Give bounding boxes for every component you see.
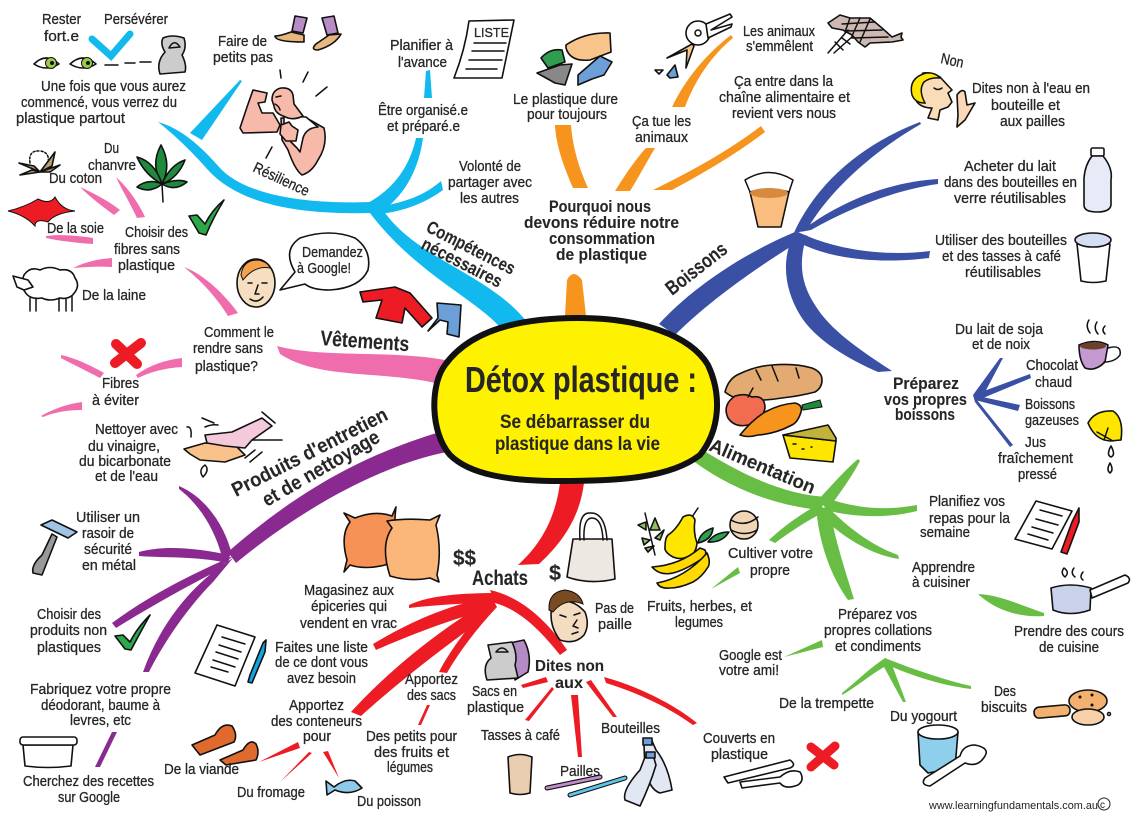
label: Chocolat chaud	[1026, 357, 1079, 391]
label: Sacs en plastique: Sacs en	[472, 683, 517, 700]
label: Non: Non	[939, 50, 965, 72]
label: Ça entre dans la chaîne alimentaire et revient vers nous	[719, 73, 851, 122]
label: Être organisé.e et préparé.e: et préparé.e	[387, 118, 460, 135]
label: Être organisé.e et préparé.e: Être organisé.e	[378, 102, 468, 119]
label: Google est votre ami!	[719, 647, 783, 679]
heading: Alimentation: Alimentation	[706, 435, 818, 499]
label: Choisir des produits non plastiques: produits non	[30, 622, 107, 639]
label: Fruits, herbes, et legumes: legumes	[675, 614, 723, 631]
label: Apprendre à cuisiner: à cuisiner	[912, 574, 970, 591]
icon: head saying no with hand	[911, 73, 975, 127]
label: Des petits pour des fruits et légumes	[366, 728, 457, 776]
label: Ça tue les animaux: animaux	[635, 129, 688, 146]
icon: bread, apple, carrot, cheese	[725, 364, 836, 462]
label: Faire de petits pas: petits pas	[213, 49, 273, 66]
label: Du poisson: Du poisson	[357, 793, 421, 810]
icon: reusable cup	[1075, 233, 1111, 282]
label: Une fois que vous aurez commencé	[16, 78, 186, 127]
icon: head with speech bubble	[237, 233, 369, 307]
label: Rester fort.e: Rester	[42, 11, 81, 28]
label: Préparez vos propres boissons	[884, 374, 967, 424]
heading: Compétences nécessaires: nécessaires	[418, 234, 506, 292]
label: Le plastique dure pour toujours: pour toujours	[527, 106, 607, 123]
heading: Vêtements: Vêtements	[320, 327, 410, 356]
panel: Compétences nécessaires branch	[16, 11, 532, 327]
label: Utiliser un rasoir de sécurité en métal: en métal	[82, 557, 136, 574]
label: Ça entre dans la chaîne alimentaire et revient vers nous: revient vers nous	[732, 105, 836, 122]
label: Cultiver votre propre	[728, 545, 813, 579]
label: Le plastique dure pour toujours: Le plastique dure	[513, 91, 618, 108]
label: De la viande: De la viande	[164, 761, 239, 778]
label: Choisir des produits non plastiques: Choisir des	[37, 606, 101, 623]
icon: list: LISTE	[474, 25, 509, 40]
heading: Boissons: Boissons	[662, 238, 732, 300]
icon: meal list and pencil	[1015, 501, 1079, 554]
icon: plastic cutlery	[724, 760, 802, 788]
heading: Compétences nécessaires: Compétences	[423, 217, 519, 279]
label: Cherchez des recettes sur Google: sur Google	[58, 789, 120, 806]
icon: sheep	[13, 268, 78, 311]
icon: plastic pieces	[537, 33, 612, 85]
label: Faites une liste de ce dont vous avez besoin: Faites une liste	[275, 639, 368, 656]
heading: Pourquoi nous devons réduire notre consommation de plastique	[524, 197, 679, 264]
label: Choisir des fibres sans plastique: Choisir des	[125, 224, 188, 241]
label: Bouteilles: Bouteilles	[601, 720, 660, 737]
panel: Produits d'entretien et de nettoyage branch	[20, 404, 447, 806]
icon: seal tangled in net	[828, 15, 903, 53]
red branches	[259, 483, 697, 782]
label: Rester fort.e	[42, 11, 81, 45]
label: Des petits pour des fruits et légumes: des fruits et	[374, 744, 450, 761]
label: Résilience: Résilience	[250, 159, 312, 200]
icon: red cross	[811, 746, 835, 767]
label: Volonté de partager avec les autres: partager avec	[448, 174, 532, 191]
label: Acheter du lait dans des bouteilles en verre réutilisables: verre réutilisables	[954, 190, 1066, 207]
label: Préparez vos propres boissons: boissons	[895, 405, 955, 424]
label: Pas de paille	[595, 600, 634, 633]
label: Sacs en plastique	[467, 683, 524, 716]
icon: lemon with drops	[1088, 411, 1122, 473]
label: Persévérer: Persévérer	[104, 11, 168, 28]
heading: Produits d'entretien et de nettoyage: Produits d'entretien	[228, 404, 392, 501]
label: Du lait de soja et de noix: et de noix	[972, 336, 1030, 353]
heading: Achats with money signs: Achats	[472, 567, 528, 590]
label: Dites non à l'eau en bouteille et aux pailles: Dites non à l'eau en	[972, 80, 1090, 97]
heading: Produits d'entretien et de nettoyage: et de nettoyage	[258, 426, 384, 511]
panel: Vêtements branch	[8, 140, 461, 417]
panel: Alimentation branch	[638, 364, 1129, 786]
label: Chocolat chaud: chaud	[1035, 374, 1072, 391]
heading: Pourquoi nous devons réduire notre consommation de plastique: devons réduire notre	[524, 213, 679, 232]
blue branches	[659, 122, 1031, 447]
heading: Achats with money signs: $	[549, 562, 561, 585]
central topic	[434, 318, 717, 481]
label: Couverts en plastique: Couverts en	[703, 730, 775, 747]
label: Prendre des cours de cuisine: de cuisine	[1039, 639, 1099, 656]
icon: tub	[20, 737, 77, 768]
label: Nettoyer avec du vinaigre, du bicarbonate et de l'eau: du bicarbonate	[79, 453, 171, 470]
label: Utiliser un rasoir de sécurité en métal: Utiliser un	[76, 509, 140, 526]
label: Les animaux s'emmêlent: s'emmêlent	[746, 38, 814, 55]
label: Des petits pour des fruits et légumes: Des petits pour	[366, 728, 457, 745]
label: Utiliser des bouteilles et des tasses à café réutilisables: et des tasses à café	[942, 248, 1061, 265]
label: Une fois que vous aurez commencé: commencé, vous verrez du	[21, 94, 177, 111]
label: Acheter du lait dans des bouteilles en verre réutilisables	[944, 158, 1077, 207]
label: Prendre des cours de cuisine: Prendre des cours	[1014, 623, 1124, 640]
label: De la laine: De la laine	[82, 287, 146, 304]
label: Couverts en plastique: plastique	[711, 746, 768, 763]
label: Google est votre ami!: votre ami!	[719, 662, 779, 679]
icon: bulk sacks	[344, 507, 440, 582]
label: Planifiez vos repas pour la semaine: Planifiez vos	[929, 493, 1005, 510]
icon: face saying no to straws	[549, 590, 587, 642]
label: Prendre des cours de cuisine	[1014, 623, 1124, 656]
label: Cultiver votre propre: propre	[750, 562, 790, 579]
panel: Achats branch	[164, 483, 835, 810]
label: Du coton: Du coton	[49, 170, 102, 187]
icon: fruits and herbs	[638, 508, 729, 588]
label: Utiliser des bouteilles et des tasses à café réutilisables: réutilisables	[965, 264, 1041, 281]
label: Apportez des conteneurs pour: des conteneurs	[271, 713, 362, 730]
website credit: www.learningfundamentals.com.au	[928, 800, 1098, 812]
label: Magasinez aux épiceries qui vendent en vrac: épiceries qui	[311, 598, 387, 615]
label: Utiliser des bouteilles et des tasses à café réutilisables	[935, 232, 1067, 281]
label: Cherchez des recettes sur Google: Cherchez des recettes	[23, 773, 154, 790]
icon: yogurt and spoon	[918, 725, 986, 786]
icon: hemp leaf	[137, 145, 187, 202]
label: Pailles: Pailles	[560, 763, 600, 780]
label: Boissons gazeuses	[1025, 396, 1079, 429]
label: Fibres à éviter: Fibres	[102, 375, 139, 392]
label: Une fois que vous aurez commencé: plastique partout	[16, 110, 126, 127]
label: Des petits pour des fruits et légumes: légumes	[387, 759, 433, 776]
label: Nettoyer avec du vinaigre, du bicarbonate et de l'eau: Nettoyer avec	[95, 421, 178, 438]
label: Comment le rendre sans plastique?: Comment le	[204, 324, 274, 341]
icon: straws	[547, 777, 625, 795]
label: Jus fraîchement pressé: pressé	[1018, 466, 1057, 483]
label: Des biscuits	[981, 683, 1027, 716]
icon: onion	[730, 511, 758, 539]
icon: glass of juice	[745, 172, 793, 227]
heading: Pourquoi nous devons réduire notre consommation de plastique: Pourquoi nous	[549, 197, 651, 216]
subtitle: Se débarrasser du	[500, 412, 650, 433]
icon: safety razor	[33, 520, 77, 575]
website credit: c	[1100, 800, 1105, 811]
subtitle	[495, 412, 660, 455]
label: Cherchez des recettes sur Google	[23, 773, 154, 806]
label: Apportez des conteneurs pour: Apportez	[289, 697, 344, 714]
label: Volonté de partager avec les autres	[448, 158, 532, 207]
label: Rester fort.e: fort.e	[44, 28, 79, 45]
label: Apportez des sacs: des sacs	[407, 687, 456, 704]
cyan branches	[158, 70, 527, 327]
label: Ça entre dans la chaîne alimentaire et revient vers nous: chaîne alimentaire et	[719, 89, 851, 106]
label: Préparez vos propres collations et condiments: et condiments	[835, 638, 921, 655]
label: Planifiez vos repas pour la semaine	[920, 493, 1011, 541]
label: Préparez vos propres boissons: Préparez	[893, 374, 959, 393]
icon: shopping list and pen	[195, 625, 266, 686]
label: Utiliser un rasoir de sécurité en métal	[76, 509, 140, 574]
label: Comment le rendre sans plastique?	[193, 324, 274, 375]
label: Fabriquez votre propre déodorant	[30, 681, 171, 729]
green branches	[692, 449, 1044, 702]
label: Boissons gazeuses: Boissons	[1025, 396, 1075, 413]
label: Utiliser des bouteilles et des tasses à café réutilisables: Utiliser des bouteilles	[935, 232, 1067, 249]
label: Jus fraîchement pressé	[998, 434, 1074, 483]
label: Préparez vos propres boissons: vos propres	[884, 390, 967, 409]
label: Faire de petits pas: Faire de	[218, 33, 267, 50]
label: Tasses à café: Tasses à café	[481, 727, 560, 744]
label: Utiliser un rasoir de sécurité en métal: rasoir de	[82, 525, 134, 542]
icon: walking feet	[275, 16, 341, 50]
icon: cloth tote bag	[567, 513, 615, 582]
label: Dites non à l'eau en bouteille et aux pailles: bouteille et	[991, 97, 1061, 114]
icon: saucepan	[1051, 568, 1129, 614]
label: Nettoyer avec du vinaigre, du bicarbonate et de l'eau: du vinaigre,	[88, 438, 160, 455]
label: Cultiver votre propre: Cultiver votre	[728, 545, 813, 562]
label: Magasinez aux épiceries qui vendent en vrac	[300, 582, 397, 632]
label: Volonté de partager avec les autres: les autres	[460, 190, 519, 207]
icon: hot drink cup	[1079, 320, 1120, 369]
label: Faites une liste de ce dont vous avez besoin: avez besoin	[287, 670, 356, 687]
label: Planifier à l'avance: Planifier à	[390, 37, 454, 54]
subtitle: plastique dans la vie	[495, 434, 660, 455]
label: Jus fraîchement pressé: Jus	[1025, 434, 1046, 451]
label: Choisir des fibres sans plastique	[114, 224, 188, 274]
icon: cleaning hand	[184, 412, 282, 477]
label: Préparez vos propres collations et condiments: Préparez vos	[838, 606, 917, 623]
label: Google est votre ami!: Google est	[719, 647, 783, 664]
label: Boissons gazeuses: gazeuses	[1025, 412, 1079, 429]
label: Apportez des conteneurs pour: pour	[303, 728, 331, 745]
icon: green tick	[115, 615, 150, 650]
title: Détox plastique :	[465, 359, 697, 400]
heading: Pourquoi nous devons réduire notre consommation de plastique: de plastique	[556, 245, 647, 264]
label: Fruits, herbes, et legumes	[647, 598, 753, 631]
label: Couverts en plastique	[703, 730, 775, 763]
label: Pas de paille: paille	[598, 616, 632, 633]
icon: seabird with plastic	[655, 14, 732, 78]
label: Apprendre à cuisiner	[912, 559, 975, 591]
label: Planifiez vos repas pour la semaine: semaine	[920, 524, 970, 541]
label: Du yogourt: Du yogourt	[890, 708, 958, 725]
label: Fibres à éviter: à éviter	[92, 392, 139, 409]
label: Ça entre dans la chaîne alimentaire et revient vers nous: Ça entre dans la	[734, 73, 834, 90]
label: Choisir des produits non plastiques	[30, 606, 107, 656]
icon: cotton	[19, 151, 60, 175]
label: Fabriquez votre propre déodorant: Fabriquez votre propre	[30, 681, 171, 698]
label: Utiliser un rasoir de sécurité en métal: sécurité	[84, 541, 132, 558]
label: Fruits, herbes, et legumes: Fruits, herbes, et	[647, 598, 753, 615]
label: Apportez des conteneurs pour	[271, 697, 362, 745]
label: Une fois que vous aurez commencé: Une fois que vous aurez	[41, 78, 186, 95]
label: Planifier à l'avance	[390, 37, 454, 71]
panel: Boissons branch	[659, 50, 1122, 483]
label: Du chanvre: chanvre	[88, 157, 136, 174]
icon: plastic bottles	[625, 738, 672, 806]
label: Faire de petits pas	[213, 33, 273, 66]
label: Apportez des sacs	[405, 671, 458, 704]
label: Le plastique dure pour toujours	[513, 91, 618, 123]
heading: Pourquoi nous devons réduire notre consommation de plastique: consommation	[549, 229, 655, 248]
label: Sacs en plastique: plastique	[467, 699, 524, 716]
icon: cookies	[1034, 690, 1110, 725]
label: Comment le rendre sans plastique?: rendre sans	[193, 340, 263, 357]
label: Faites une liste de ce dont vous avez besoin	[275, 639, 368, 687]
label: Du fromage: Du fromage	[237, 784, 305, 801]
label: Demandez à Google!: Demandez	[302, 244, 363, 261]
label: Demandez à Google!: à Google!	[297, 260, 351, 277]
label: Comment le rendre sans plastique?: plastique?	[195, 358, 258, 375]
heading: Achats with money signs	[453, 547, 561, 590]
label: Du lait de soja et de noix	[955, 321, 1044, 353]
label: Être organisé.e et préparé.e	[378, 102, 468, 135]
label: Chocolat chaud: Chocolat	[1026, 357, 1079, 374]
icon: red silk	[8, 197, 75, 226]
label: Pas de paille: Pas de	[595, 600, 634, 617]
label: Fabriquez votre propre déodorant: levres, etc	[70, 712, 131, 729]
label: Ça tue les animaux: Ça tue les	[632, 113, 691, 130]
label: Des biscuits: Des	[994, 683, 1016, 700]
label: Fibres à éviter	[92, 375, 139, 409]
label: Demandez à Google!	[297, 244, 363, 277]
icon: cyan tick, eyes and bag	[34, 34, 186, 74]
label: Dites non aux	[535, 658, 604, 692]
label: Magasinez aux épiceries qui vendent en vrac: Magasinez aux	[304, 582, 394, 599]
label: Les animaux s'emmêlent: Les animaux	[743, 23, 815, 40]
icon: red sweater and blue shorts	[360, 287, 461, 337]
label: Choisir des produits non plastiques: plastiques	[37, 639, 101, 656]
label: Choisir des fibres sans plastique: fibres sans	[114, 241, 180, 258]
label: Des biscuits: biscuits	[981, 699, 1027, 716]
pink branches	[41, 177, 445, 417]
icon: takeaway cup	[508, 754, 532, 794]
icon: plastic bags	[485, 640, 529, 680]
orange branches	[555, 35, 765, 316]
label: Choisir des fibres sans plastique: plastique	[118, 257, 175, 274]
icon: milk bottle	[1084, 148, 1111, 212]
heading: Achats with money signs: $$	[453, 547, 476, 570]
label: Planifier à l'avance: l'avance	[398, 54, 447, 71]
label: De la trempette: De la trempette	[779, 695, 874, 712]
label: Planifiez vos repas pour la semaine: repas pour la	[929, 510, 1011, 527]
label: Apportez des sacs: Apportez	[405, 671, 458, 688]
label: Acheter du lait dans des bouteilles en verre réutilisables: dans des bouteilles en	[944, 174, 1077, 191]
label: Préparez vos propres collations et condiments: propres collations	[824, 622, 932, 639]
label: Volonté de partager avec les autres: Volonté de	[459, 158, 521, 175]
label: Acheter du lait dans des bouteilles en verre réutilisables: Acheter du lait	[964, 158, 1057, 175]
label: Du lait de soja et de noix: Du lait de soja	[955, 321, 1044, 338]
label: Nettoyer avec du vinaigre, du bicarbonate et de l'eau: et de l'eau	[95, 468, 158, 485]
icon: meat	[192, 725, 258, 765]
label: Du chanvre: Du	[104, 140, 119, 157]
icon: fish	[326, 780, 362, 795]
icon: list	[454, 20, 514, 78]
label: Ça tue les animaux	[632, 113, 691, 146]
label: Préparez vos propres collations et condiments	[824, 606, 932, 655]
icon: green tick	[189, 200, 224, 235]
label: Dites non à l'eau en bouteille et aux pailles: aux pailles	[1000, 113, 1065, 130]
label: Dites non aux: aux	[555, 675, 583, 692]
label: De la soie: De la soie	[47, 220, 104, 237]
label: Fabriquez votre propre déodorant: déodorant, baume à	[41, 697, 161, 714]
label: Dites non aux: Dites non	[535, 658, 604, 675]
label: Faites une liste de ce dont vous avez besoin: de ce dont vous	[275, 654, 368, 671]
label: Magasinez aux épiceries qui vendent en vrac: vendent en vrac	[300, 615, 397, 632]
icon: flexing strong man	[240, 70, 327, 175]
label: Dites non à l'eau en bouteille et aux pailles	[972, 80, 1090, 130]
label: Jus fraîchement pressé: fraîchement	[998, 450, 1074, 467]
label: Les animaux s'emmêlent	[743, 23, 815, 55]
icon: red cross	[115, 343, 141, 364]
label: Nettoyer avec du vinaigre, du bicarbonate et de l'eau	[79, 421, 178, 485]
label: Du chanvre	[88, 140, 136, 174]
panel: Pourquoi nous devons réduire branch	[513, 14, 903, 316]
label: Apprendre à cuisiner: Apprendre	[912, 559, 975, 576]
purple branches	[95, 432, 447, 767]
